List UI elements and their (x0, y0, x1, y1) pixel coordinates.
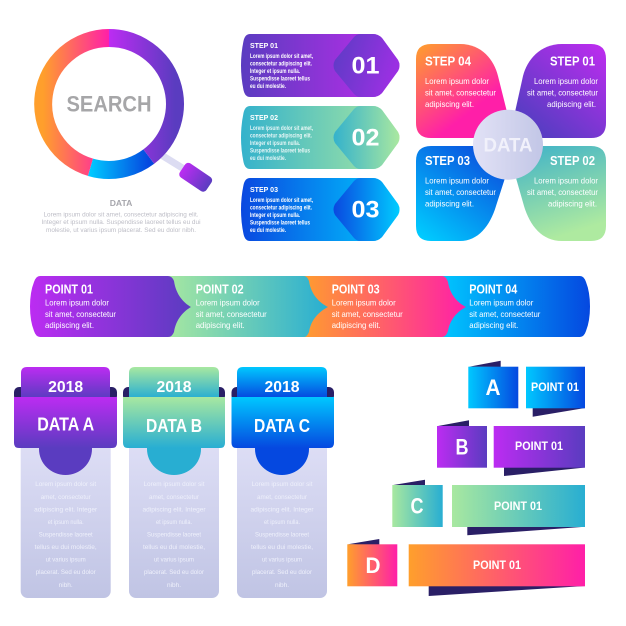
icon: ring segment orange (43, 38, 109, 167)
icon: magnifier handle (150, 148, 214, 193)
column text: et ipsum nulla. (264, 519, 300, 526)
step 01 text: Lorem ipsum dolor (534, 77, 598, 86)
column text: ut varius ipsum (154, 556, 194, 564)
column text: tellus eu dui molestie, (143, 544, 205, 551)
center label: DATA (484, 134, 532, 156)
icon: ring segment purple (109, 38, 175, 157)
segment: point 01 (30, 276, 191, 337)
panel: data A column (14, 367, 117, 598)
panel: search magnifier (42, 38, 214, 234)
point 02 text: POINT 02 (196, 282, 244, 296)
step 02 text: sit amet, consectetur (527, 188, 598, 197)
point 02 text: sit amet, consectetur (196, 310, 267, 319)
step text: eu dui molestie. (250, 83, 286, 90)
point 01 text: Lorem ipsum dolor (45, 298, 109, 307)
point 04 text: adipiscing elit. (469, 321, 518, 330)
panel: points arrow bar (30, 276, 590, 337)
data description: Lorem ipsum dolor sit amet, consectetur adipiscing elit. (44, 212, 199, 218)
step 01 text: STEP 01 (550, 55, 595, 69)
panel: data C column (232, 367, 334, 598)
column text: adipiscing elit. Integer (142, 506, 206, 514)
dark fold (123, 387, 225, 401)
step 04 text (425, 55, 496, 109)
step text: Suspendisse laoreet tellus (250, 148, 310, 155)
column text: nibh. (275, 582, 289, 589)
letter flag: B (456, 434, 468, 460)
step text: Integer et ipsum nulla. (250, 68, 300, 75)
letter flag (347, 539, 397, 586)
panel: ribbon C (392, 480, 585, 535)
point 01 text: POINT 01 (45, 282, 93, 296)
panel: step 03 card (241, 178, 400, 241)
petal: step 02 (516, 146, 606, 241)
number: 02 (352, 124, 380, 152)
panel: ribbon A (468, 361, 585, 417)
number: 03 (352, 196, 380, 224)
segment: point 04 (440, 276, 590, 337)
segment: point 03 (300, 276, 466, 337)
step text (250, 197, 313, 234)
card body (241, 34, 400, 97)
data description: molestie, ut varius ipsum placerat. Sed eu dolor nibh. (46, 227, 196, 234)
step text: consectetur adipiscing elit. (250, 205, 312, 212)
step text: Integer et ipsum nulla. (250, 212, 300, 219)
column text: Suspendisse laoreet (39, 532, 93, 538)
band and drop (14, 397, 117, 475)
step text (250, 125, 313, 162)
panel: step 02 card (241, 106, 400, 169)
step text: Suspendisse laoreet tellus (250, 76, 310, 83)
step text: eu dui molestie. (250, 155, 286, 162)
pale body (129, 420, 219, 598)
column text: Suspendisse laoreet (147, 532, 201, 538)
pale body (237, 420, 327, 598)
step 04 text: STEP 04 (425, 55, 471, 69)
step 03 text: STEP 03 (425, 154, 470, 168)
point 03 text: sit amet, consectetur (332, 310, 403, 319)
step text: Integer et ipsum nulla. (250, 140, 300, 147)
data label: DATA A (37, 414, 94, 434)
letter flag: C (410, 494, 424, 518)
card body (241, 178, 400, 241)
year tab (21, 367, 110, 398)
panel: step 01 card (241, 34, 400, 97)
data label: DATA C (254, 416, 310, 436)
column text (250, 481, 314, 589)
point 04 text (469, 282, 541, 330)
column text: adipiscing elit. Integer (34, 506, 98, 514)
step label: STEP 01 (250, 41, 278, 50)
step 02 text: adipiscing elit. (548, 200, 597, 209)
number badge (334, 34, 400, 97)
pale body (21, 420, 111, 598)
point flag (452, 485, 585, 535)
letter flag (437, 420, 487, 468)
point 02 text: Lorem ipsum dolor (196, 298, 260, 307)
column text: et ipsum nulla. (48, 519, 84, 526)
column text: ut varius ipsum (46, 556, 86, 564)
column text: adipiscing elit. Integer (250, 506, 314, 514)
step 04 text: sit amet, consectetur (425, 89, 496, 98)
step 02 text: Lorem ipsum dolor (534, 177, 598, 186)
data heading: DATA (110, 198, 132, 208)
point flag: POINT 01 (515, 441, 564, 453)
column text (142, 481, 206, 589)
year: 2018 (48, 379, 84, 396)
column text (34, 481, 98, 589)
point flag (494, 426, 585, 476)
step text: Lorem ipsum dolor sit amet, (250, 53, 313, 60)
step 02 text: STEP 02 (550, 154, 595, 168)
point 04 text: POINT 04 (469, 282, 517, 296)
step 01 text: sit amet, consectetur (527, 89, 598, 98)
data description: Integer et ipsum nulla. Suspendisse laoreet tellus eu dui (42, 219, 201, 226)
step text (250, 53, 313, 90)
panel: data B column (123, 367, 225, 598)
point 02 text: adipiscing elit. (196, 321, 245, 330)
petal: step 04 (416, 44, 507, 138)
year: 2018 (264, 379, 300, 396)
step 02 text (527, 154, 598, 209)
column text: Lorem ipsum dolor sit (144, 481, 205, 488)
petal: step 03 (416, 146, 505, 241)
panel: ribbon D (347, 539, 585, 596)
number badge (334, 106, 400, 169)
point 04 text: sit amet, consectetur (469, 310, 541, 319)
step 01 text (527, 55, 598, 109)
search word: SEARCH (66, 92, 152, 116)
point 03 text (332, 282, 403, 330)
column text: tellus eu dui molestie, (251, 544, 313, 551)
step text: eu dui molestie. (250, 227, 286, 234)
step text: consectetur adipiscing elit. (250, 133, 312, 140)
point flag: POINT 01 (473, 560, 522, 572)
step 03 text: sit amet, consectetur (425, 188, 496, 197)
center circle (473, 110, 543, 180)
point 03 text: adipiscing elit. (332, 321, 381, 330)
panel: data petal diagram (416, 44, 606, 241)
point 01 text: adipiscing elit. (45, 321, 94, 330)
step text: Lorem ipsum dolor sit amet, (250, 125, 313, 132)
column text: nibh. (59, 582, 73, 589)
card body (241, 106, 400, 169)
column text: amet, consectetur (149, 494, 200, 501)
letter flag: A (486, 375, 501, 400)
step label: STEP 03 (250, 185, 278, 194)
panel: ribbon B (437, 420, 585, 476)
data description (42, 212, 201, 234)
point 04 text: Lorem ipsum dolor (469, 298, 534, 307)
step text: Lorem ipsum dolor sit amet, (250, 197, 313, 204)
petal: step 01 (515, 44, 606, 138)
point 03 text: POINT 03 (332, 282, 380, 296)
step text: consectetur adipiscing elit. (250, 61, 312, 68)
data label: DATA B (146, 416, 202, 436)
column text: tellus eu dui molestie, (35, 544, 97, 551)
point 03 text: Lorem ipsum dolor (332, 298, 396, 307)
column text: amet, consectetur (41, 494, 92, 501)
number badge (334, 178, 400, 241)
icon: ring segment blue (90, 157, 149, 170)
point flag (409, 544, 585, 596)
column text: placerat. Sed eu dolor (144, 569, 205, 576)
step 03 text (425, 154, 496, 209)
step 04 text: Lorem ipsum dolor (425, 77, 489, 86)
point flag: POINT 01 (531, 382, 580, 394)
column text: Lorem ipsum dolor sit (35, 481, 96, 488)
step 01 text: adipiscing elit. (547, 100, 596, 109)
column text: nibh. (167, 582, 181, 589)
step text: Suspendisse laoreet tellus (250, 220, 310, 227)
number: 01 (352, 52, 380, 80)
segment: point 02 (165, 276, 328, 337)
dark fold (14, 387, 117, 401)
column text: Suspendisse laoreet (255, 532, 309, 538)
column text: ut varius ipsum (262, 556, 302, 564)
year: 2018 (156, 379, 192, 396)
point flag: POINT 01 (494, 501, 543, 513)
step 04 text: adipiscing elit. (425, 100, 474, 109)
column text: et ipsum nulla. (156, 519, 192, 526)
year tab (237, 367, 327, 398)
column text: placerat. Sed eu dolor (36, 569, 97, 576)
step 03 text: adipiscing elit. (425, 200, 474, 209)
dark fold (232, 387, 334, 401)
band and drop (232, 397, 334, 475)
column text: Lorem ipsum dolor sit (252, 481, 313, 488)
column text: amet, consectetur (257, 494, 308, 501)
step 03 text: Lorem ipsum dolor (425, 177, 489, 186)
year tab (129, 367, 219, 398)
point 02 text (196, 282, 267, 330)
column text: placerat. Sed eu dolor (252, 569, 313, 576)
point 01 text: sit amet, consectetur (45, 310, 116, 319)
letter flag: D (366, 553, 380, 578)
band and drop (123, 397, 225, 475)
letter flag (392, 480, 443, 527)
step label: STEP 02 (250, 113, 278, 122)
point 01 text (45, 282, 116, 330)
